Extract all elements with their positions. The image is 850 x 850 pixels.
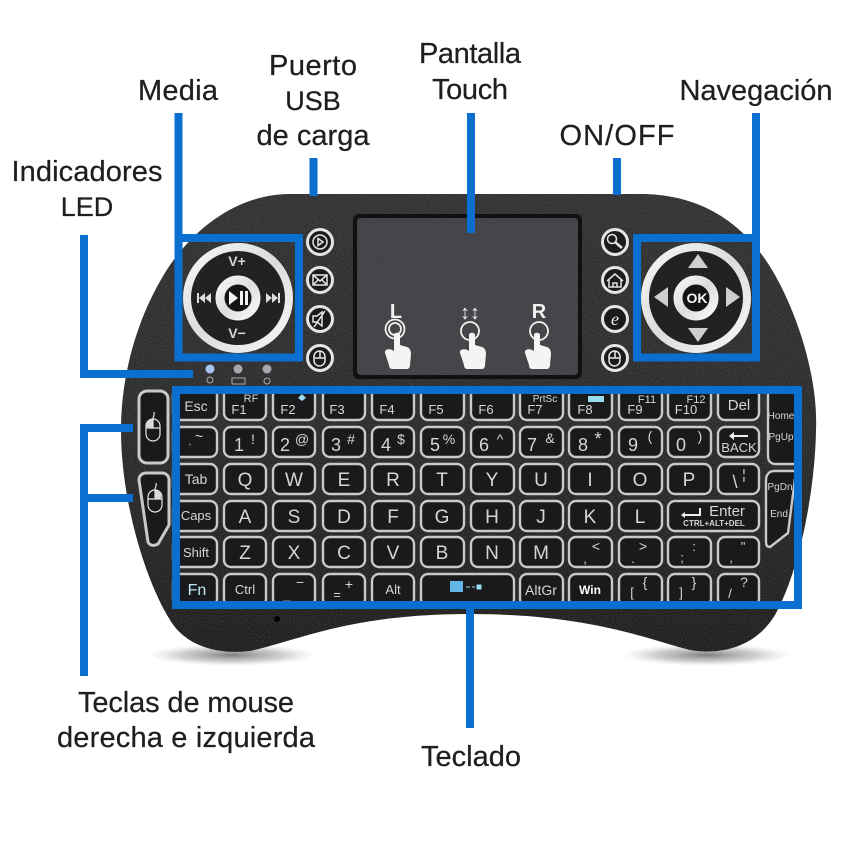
row 2: number keys xyxy=(173,427,759,457)
row 2: number keys: 2 xyxy=(280,435,290,455)
row 4: home row letters: Caps xyxy=(181,508,212,523)
label: Indicadores LED: LED xyxy=(61,192,113,222)
media dial xyxy=(187,247,289,349)
row 2: number keys: ) xyxy=(698,428,702,444)
keyboard body xyxy=(121,194,816,652)
row 1: function keys: F8 xyxy=(577,402,593,417)
row 1: function keys: F1 xyxy=(231,402,247,417)
row 1: function keys: Del xyxy=(728,397,750,414)
touchpad scroll gesture xyxy=(460,302,486,369)
page down and end key xyxy=(766,471,796,547)
row 2: number keys: 9 xyxy=(628,435,638,455)
row 5: bottom letters: C xyxy=(337,543,351,564)
row 1: function keys xyxy=(173,388,759,420)
row 6: modifier keys and space bar: + xyxy=(345,576,353,592)
touchpad right click gesture xyxy=(525,301,551,369)
right function buttons: e xyxy=(611,309,619,329)
LED indicators xyxy=(206,364,272,384)
page down and end key: PgDn xyxy=(767,482,793,493)
row 3: QWERTY letters: Y xyxy=(486,470,499,491)
row 2: number keys: 1 xyxy=(234,435,244,455)
row 4: home row letters: K xyxy=(584,507,597,528)
row 1: function keys: F4 xyxy=(379,402,395,417)
row 2: number keys: ` xyxy=(188,443,192,455)
label: Teclas de mouse: derecha e izquierda xyxy=(57,722,316,754)
row 1: function keys: RF xyxy=(244,393,259,405)
row 5: bottom letters: V xyxy=(387,543,400,564)
row 3: QWERTY letters: E xyxy=(338,470,350,491)
label: ON/OFF: ON/OFF xyxy=(560,120,674,152)
shadow under keyboard right foot xyxy=(621,644,791,666)
row 1: function keys: F9 xyxy=(627,402,643,417)
home and page up key: PgUp xyxy=(768,432,794,443)
callout line: mouse keys xyxy=(84,428,133,676)
callout line: USB port xyxy=(310,158,318,196)
row 3: QWERTY letters: P xyxy=(683,470,695,491)
row 1: function keys: Esc xyxy=(184,398,208,414)
left mouse keys xyxy=(139,391,169,545)
row 2: number keys: ! xyxy=(251,431,255,447)
row 6: modifier keys and space bar: = xyxy=(333,587,341,602)
row 6: modifier keys and space bar: [ xyxy=(630,585,634,600)
row 2: number keys: BACK xyxy=(721,440,757,455)
row 2: number keys: ^ xyxy=(497,431,504,447)
row 5: bottom letters: Z xyxy=(239,543,251,564)
row 6: modifier keys and space bar: Ctrl xyxy=(235,582,255,597)
callout frame: media xyxy=(178,113,299,358)
row 2: number keys: 4 xyxy=(381,435,391,455)
row 1: function keys: F2 xyxy=(280,402,296,417)
row 6: modifier keys and space bar: AltGr xyxy=(525,582,557,598)
row 6: modifier keys and space bar: − xyxy=(296,574,304,590)
label: Pantalla Touch: Pantalla xyxy=(419,38,522,70)
touchpad left click gesture: L xyxy=(390,301,402,323)
row 4: home row letters: CTRL+ALT+DEL xyxy=(683,519,745,528)
row 6: modifier keys and space bar: ? xyxy=(740,574,748,590)
left click key xyxy=(139,391,168,463)
row 6: modifier keys and space bar: { xyxy=(643,574,648,590)
label: Puerto USB de carga: USB xyxy=(285,86,341,116)
row 2: number keys: 6 xyxy=(479,435,489,455)
body texture xyxy=(115,190,825,660)
row 3: QWERTY letters xyxy=(173,464,759,494)
row 4: home row letters: S xyxy=(288,507,300,528)
row 5: bottom letters: X xyxy=(288,543,301,564)
row 1: function keys: F7 xyxy=(527,402,543,417)
row 1: function keys: F3 xyxy=(329,402,345,417)
media dial: V− xyxy=(228,325,246,341)
row 1: function keys: F5 xyxy=(428,402,444,417)
callout line: LED indicators xyxy=(84,235,193,374)
row 2: number keys: 0 xyxy=(676,435,686,455)
label: Media: Media xyxy=(138,75,219,107)
row 6: modifier keys and space bar: Fn xyxy=(188,582,206,599)
left function buttons xyxy=(308,230,332,370)
label: Indicadores LED xyxy=(12,156,162,222)
row 3: QWERTY letters: U xyxy=(534,470,548,491)
row 5: bottom letters xyxy=(173,537,759,567)
callout line: keyboard xyxy=(466,605,474,728)
row 1: function keys: F10 xyxy=(675,402,697,417)
row 5: bottom letters: Shift xyxy=(183,545,209,560)
row 2: number keys: # xyxy=(347,431,355,447)
callout line: on/off xyxy=(613,158,621,195)
keyboard device xyxy=(115,190,825,660)
row 4: home row letters: G xyxy=(435,507,449,528)
row 5: bottom letters: ; xyxy=(680,550,684,565)
row 1: function keys: PrtSc xyxy=(533,394,557,405)
media dial: V+ xyxy=(228,253,246,269)
row 4: home row letters xyxy=(173,501,759,531)
row 5: bottom letters: , xyxy=(729,550,733,565)
row 6: modifier keys and space bar: _ xyxy=(282,587,291,602)
shadow under keyboard left foot xyxy=(147,644,317,666)
row 3: QWERTY letters: W xyxy=(285,470,303,491)
row 5: bottom letters: : xyxy=(692,539,696,554)
label: Teclado: Teclado xyxy=(421,741,521,773)
key rows xyxy=(173,388,759,606)
row 3: QWERTY letters: Q xyxy=(238,470,252,491)
microphone hole xyxy=(274,616,280,622)
row 5: bottom letters: , xyxy=(583,551,587,566)
row 4: home row letters: J xyxy=(536,507,546,528)
callout frame: navigation xyxy=(637,113,756,358)
row 5: bottom letters: B xyxy=(436,543,448,564)
row 3: QWERTY letters: \ xyxy=(732,472,738,492)
row 3: QWERTY letters: ¦ xyxy=(742,466,746,482)
row 2: number keys: % xyxy=(443,431,455,447)
row 5: bottom letters: M xyxy=(533,543,549,564)
row 4: home row letters: H xyxy=(485,507,499,528)
row 3: QWERTY letters: I xyxy=(587,470,593,491)
row 5: bottom letters: > xyxy=(639,538,647,554)
label: Pantalla Touch: Touch xyxy=(432,74,508,106)
label: Puerto USB de carga: de carga xyxy=(256,120,370,152)
row 3: QWERTY letters: O xyxy=(633,470,647,491)
row 3: QWERTY letters: T xyxy=(436,470,448,491)
label: Indicadores LED: Indicadores xyxy=(12,156,162,188)
row 3: QWERTY letters: R xyxy=(386,470,400,491)
row 3: QWERTY letters: Tab xyxy=(185,471,207,487)
row 4: home row letters: F xyxy=(387,507,399,528)
row 4: home row letters: L xyxy=(635,507,645,528)
row 6: modifier keys and space bar: / xyxy=(728,586,732,601)
row 2: number keys: ( xyxy=(648,428,653,444)
navigation dial xyxy=(645,247,747,349)
row 2: number keys: 3 xyxy=(331,435,341,455)
row 4: home row letters: Enter xyxy=(709,503,745,520)
row 6: modifier keys and space bar: Alt xyxy=(385,582,401,597)
home and page up key: Home xyxy=(768,411,795,422)
row 2: number keys: $ xyxy=(397,431,405,447)
label: Teclas de mouse: Teclas de mouse xyxy=(78,687,294,719)
touchpad right click gesture: R xyxy=(532,301,547,323)
row 2: number keys: @ xyxy=(295,431,309,447)
label: Pantalla Touch xyxy=(419,38,522,106)
row 2: number keys: 5 xyxy=(430,435,440,455)
row 6: modifier keys and space bar: Win xyxy=(579,583,601,597)
row 4: home row letters: D xyxy=(337,507,351,528)
row 5: bottom letters: < xyxy=(592,538,600,554)
row 2: number keys: * xyxy=(594,429,602,449)
row 5: bottom letters: N xyxy=(485,543,499,564)
row 2: number keys: & xyxy=(545,430,555,446)
label: Puerto USB de carga: Puerto xyxy=(269,50,357,82)
row 2: number keys: 8 xyxy=(578,435,588,455)
right click key xyxy=(139,473,169,545)
right side keys xyxy=(766,388,796,547)
row 2: number keys: ~ xyxy=(195,428,203,444)
row 6: modifier keys and space bar: ] xyxy=(679,585,683,600)
row 4: home row letters: A xyxy=(239,507,252,528)
right function buttons xyxy=(602,230,628,370)
row 1: function keys: F11 xyxy=(638,394,656,406)
row 2: number keys: 7 xyxy=(527,435,537,455)
row 1: function keys: F12 xyxy=(687,394,705,406)
touchpad left click gesture xyxy=(385,301,411,369)
label: Teclas de mouse xyxy=(57,687,316,754)
row 1: function keys: F6 xyxy=(478,402,494,417)
callout frame: keyboard xyxy=(176,390,798,605)
label: Puerto USB de carga xyxy=(256,50,370,152)
callout line: touch screen xyxy=(467,113,475,233)
touchpad xyxy=(353,214,582,379)
row 5: bottom letters: " xyxy=(741,539,746,554)
label: Navegación: Navegación xyxy=(680,75,832,107)
row 6: modifier keys and space bar xyxy=(173,574,759,606)
page down and end key: End xyxy=(770,509,788,520)
row 5: bottom letters: . xyxy=(631,551,635,566)
row 6: modifier keys and space bar: } xyxy=(692,574,697,590)
touchpad scroll gesture: ↕↕ xyxy=(460,302,480,324)
navigation dial: OK xyxy=(686,290,708,306)
home and page up key xyxy=(768,388,796,464)
